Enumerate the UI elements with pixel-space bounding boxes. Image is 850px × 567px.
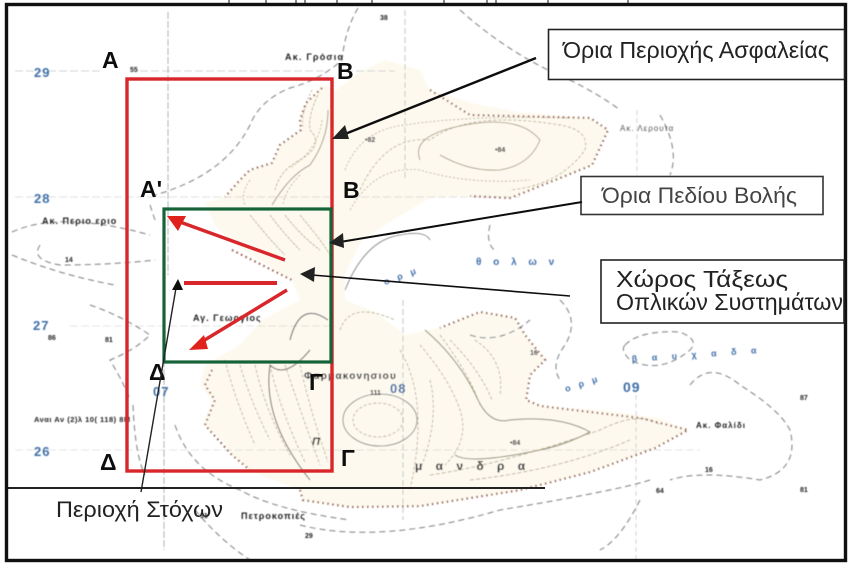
red arrow: north-west	[167, 216, 285, 260]
spot heights: 64	[656, 488, 664, 495]
corner label Gamma outer: Γ	[341, 445, 355, 471]
corner label A outer: Α	[102, 47, 119, 73]
place name: Ak. Perioteri: Ακ. Περιο εριο	[42, 216, 117, 226]
spot heights: 86	[48, 335, 56, 342]
leader arrows	[141, 58, 582, 492]
horizontal rule	[7, 487, 545, 489]
spot heights: 81	[105, 337, 113, 344]
bay name: Tholon: θ ο λ ω ν	[476, 257, 559, 268]
place name: Mandra: μ α ν δ ρ α	[415, 459, 530, 473]
place name: Ag. Georgios: Αγ. Γεωργιος	[193, 313, 262, 323]
contour lines	[225, 90, 660, 490]
place name: Petrokopies: Πετροκοπιές	[241, 511, 306, 521]
spot heights: 29	[305, 533, 313, 540]
island landmass	[200, 60, 688, 507]
spot heights: 38	[380, 15, 388, 22]
grid label 29: 29	[34, 65, 50, 80]
callout: firing range limits: Όρια Πεδίου Βολής	[601, 183, 797, 208]
callout: firing range limits	[581, 176, 823, 214]
corner label B outer: Β	[337, 58, 354, 84]
arrow: to deployment area	[300, 267, 570, 296]
grid label 27: 27	[33, 318, 49, 333]
spot heights: •82	[365, 137, 375, 144]
place name: Ak. Grosia: Ακ. Γρόσια	[285, 52, 344, 62]
corner label A inner: Α'	[140, 176, 162, 202]
corner label Delta outer: Δ	[100, 449, 117, 475]
red firing arrows	[167, 216, 287, 350]
callout: target area: Περιοχή Στόχων	[56, 497, 223, 522]
spot heights: 16	[705, 467, 713, 474]
bay name: Orm Tholon: ο ρ μ	[382, 265, 420, 287]
spot heights: •84	[510, 440, 520, 447]
place name: Ak. Faldi: Ακ. Φαλίδι	[696, 421, 746, 430]
red arrow: west	[184, 281, 277, 285]
place name: Pyrgomandra: Π	[312, 436, 322, 448]
corner letters	[100, 47, 360, 475]
spot heights: 14	[65, 257, 73, 264]
spot heights: 16	[530, 350, 538, 357]
arrow: to target area	[141, 279, 183, 492]
bay name: Orm Vathychada: ο ρ μ	[564, 373, 601, 394]
spot heights: 55	[130, 67, 138, 74]
safety area red rectangle	[127, 79, 332, 471]
firing range green rectangle	[164, 209, 331, 362]
spot heights: •84	[495, 147, 505, 154]
place name: Ak. Lerouta: Ακ. Λερουτα	[620, 124, 674, 133]
corner label Delta inner: Δ	[149, 359, 166, 385]
callout: safety area limits: Όρια Περιοχής Ασφαλείας	[562, 37, 829, 63]
grid label 09: 09	[623, 379, 641, 395]
spot heights: 87	[800, 395, 808, 402]
grid label 28: 28	[34, 191, 50, 206]
callout: weapon systems deployment area: Χώρος Τάξεως	[616, 266, 788, 292]
grid label 08: 08	[390, 381, 406, 396]
bay name: Vathychada: β α υ χ α δ α	[631, 345, 763, 364]
top cut-off text marks	[229, 0, 628, 3]
red arrow: south-west	[189, 290, 287, 350]
corner label B inner: Β	[343, 177, 360, 203]
grid label 26: 26	[34, 444, 50, 459]
spot heights: 111	[370, 390, 381, 397]
corner label Gamma inner: Γ	[309, 369, 323, 395]
note: chart annotation: Αναι Αν (2)λ 10( 118) 8Μ	[34, 415, 131, 424]
arrow: to firing range	[329, 202, 582, 248]
arrow: to safety area	[332, 58, 536, 139]
callout: safety area limits	[548, 30, 844, 80]
grid label 07: 07	[153, 384, 169, 399]
place name: Farmakonisiou: Φαρμακονησιου	[304, 371, 397, 382]
spot heights: 81	[800, 487, 808, 494]
grid lines	[15, 10, 700, 560]
callout: weapon systems deployment area: Οπλικών Συστημάτων	[616, 289, 843, 315]
coastline dots	[205, 88, 688, 507]
callout: weapon systems deployment area	[601, 260, 844, 323]
spot heights: 31	[200, 513, 208, 520]
